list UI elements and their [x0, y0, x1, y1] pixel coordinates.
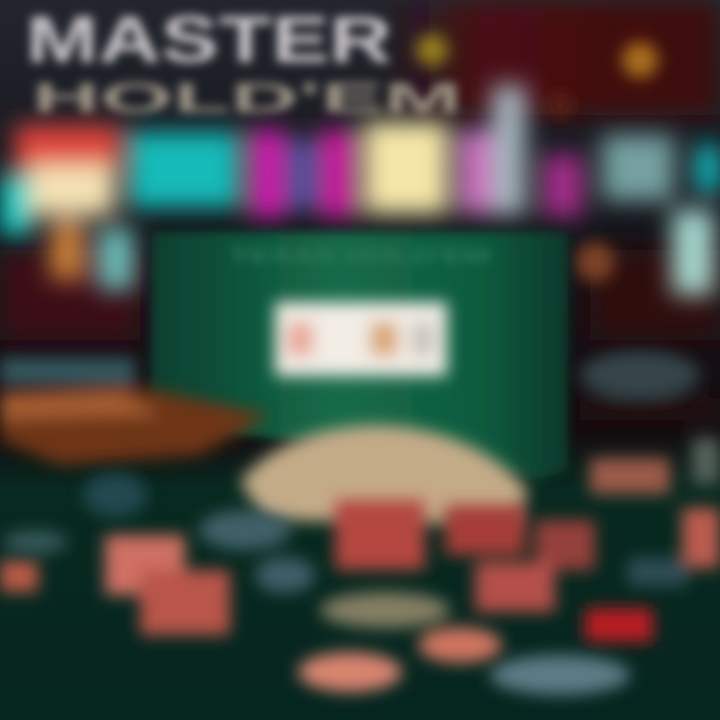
heading text: MASTER [26, 2, 392, 76]
green felt panel [150, 232, 568, 480]
red chip pile [0, 500, 653, 642]
colourful banner [0, 85, 720, 295]
bokeh lights [416, 34, 658, 282]
blue and teal chips [3, 473, 630, 695]
heading text [26, 2, 462, 121]
community cards [275, 302, 447, 376]
hand on the left [0, 358, 270, 465]
panel caption: TEXAS HOLD'EM [230, 246, 490, 266]
bottom chips [298, 592, 502, 692]
right chip stacks [580, 351, 720, 586]
fan of cards [240, 425, 528, 525]
heading text: HOLD'EM [32, 74, 462, 121]
